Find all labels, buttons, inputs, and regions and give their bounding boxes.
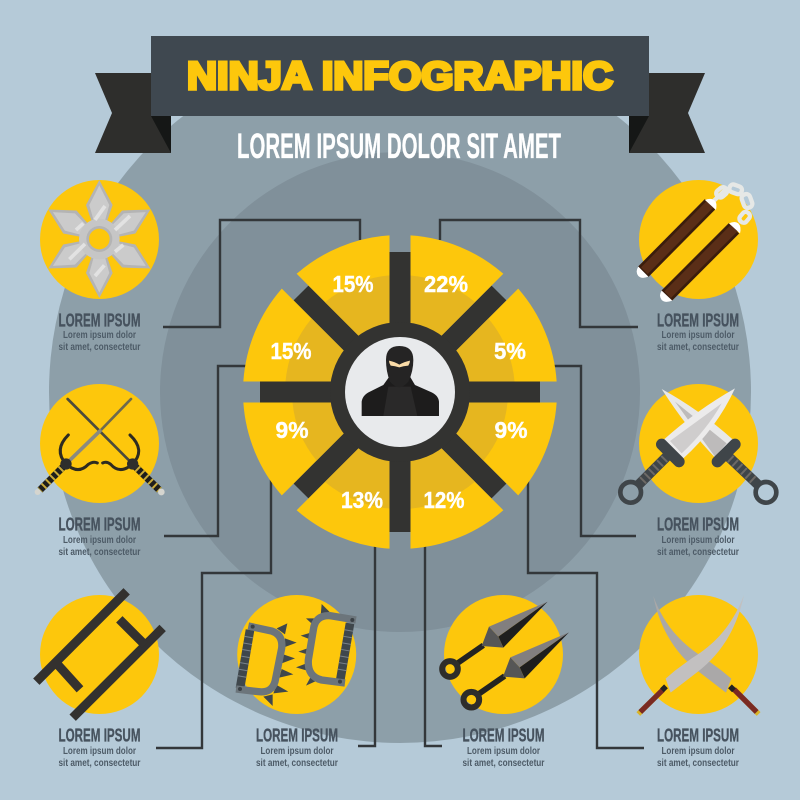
label: LOREM IPSUM xyxy=(58,724,140,746)
label: Lorem ipsum dolor xyxy=(662,746,735,757)
value 15% top: 15% xyxy=(332,271,374,297)
ribbon right tail xyxy=(629,73,705,153)
value 5%: 5% xyxy=(494,338,526,364)
label: LOREM IPSUM xyxy=(58,310,140,330)
ribbon banner with title xyxy=(95,36,705,153)
dark spokes xyxy=(260,252,540,532)
segment 5% xyxy=(425,289,584,447)
item: crossed swords xyxy=(638,595,759,769)
icon: shuriken xyxy=(42,180,157,298)
label: Lorem ipsum dolor xyxy=(63,746,136,757)
icon: tonfa pair xyxy=(36,591,163,718)
label: sit amet, consectetur xyxy=(58,547,141,558)
label: sit amet, consectetur xyxy=(462,758,545,769)
icon: crossed swords xyxy=(638,595,759,714)
icon: ninja xyxy=(362,346,439,416)
item: nunchaku xyxy=(637,180,758,353)
percent labels xyxy=(270,271,528,513)
segment 9% right xyxy=(425,402,557,495)
connector: kunai to 12% xyxy=(425,540,442,746)
segment 15% top xyxy=(297,208,455,367)
value 13%: 13% xyxy=(341,487,383,513)
value 12%: 12% xyxy=(424,487,464,513)
ribbon left tail xyxy=(95,73,171,153)
value 9% right: 9% xyxy=(494,417,528,443)
label: LOREM IPSUM xyxy=(657,310,739,330)
label: Lorem ipsum dolor xyxy=(63,330,136,341)
connector: sai to 15% xyxy=(164,366,250,536)
item: tonfa xyxy=(36,591,163,769)
item: throwing knives xyxy=(620,384,776,558)
connector: throwing knives to 5% xyxy=(550,366,636,536)
connector: tonfa to 9% xyxy=(156,478,271,748)
label: LOREM IPSUM xyxy=(657,724,739,746)
label xyxy=(58,724,141,769)
label: sit amet, consectetur xyxy=(657,342,739,353)
label: Lorem ipsum dolor xyxy=(662,535,735,546)
item: shuriken xyxy=(40,180,159,353)
icon: nunchaku xyxy=(637,183,753,302)
label xyxy=(58,310,141,353)
label xyxy=(58,514,141,558)
item: brass knuckles xyxy=(236,595,356,769)
segment 13% xyxy=(297,417,390,549)
segment 12% xyxy=(345,417,503,576)
label: sit amet, consectetur xyxy=(58,342,141,353)
label: LOREM IPSUM xyxy=(462,724,544,746)
label xyxy=(256,724,338,769)
connector: shuriken to 15% xyxy=(163,220,360,327)
label: sit amet, consectetur xyxy=(657,547,739,558)
radial chart xyxy=(216,208,584,576)
icon: crossed throwing knives xyxy=(620,388,776,503)
label: sit amet, consectetur xyxy=(657,758,739,769)
icon: crossed sai xyxy=(35,399,165,495)
hub white disc xyxy=(345,337,455,447)
connector: knuckles to 13% xyxy=(358,540,375,746)
value 15% left: 15% xyxy=(270,338,312,364)
title: NINJA INFOGRAPHIC xyxy=(187,55,613,98)
segment 15% left xyxy=(243,289,375,382)
ribbon main band xyxy=(151,36,649,116)
value 9% left: 9% xyxy=(276,417,308,443)
icon: kunai pair xyxy=(442,602,569,707)
label: Lorem ipsum dolor xyxy=(662,330,735,341)
icon: brass knuckles xyxy=(236,604,356,706)
label: LOREM IPSUM xyxy=(58,514,140,534)
item: kunai xyxy=(442,595,569,769)
connector: nunchaku to 22% xyxy=(440,220,638,327)
label: sit amet, consectetur xyxy=(256,758,338,769)
dark hub ring xyxy=(330,322,470,462)
segment 9% left xyxy=(216,337,375,495)
label: LOREM IPSUM xyxy=(256,724,338,746)
label: Lorem ipsum dolor xyxy=(63,535,136,546)
label: Lorem ipsum dolor xyxy=(260,746,334,757)
value 22%: 22% xyxy=(424,271,468,297)
segment 22% xyxy=(410,235,503,367)
label xyxy=(657,514,739,558)
item: sai xyxy=(35,384,165,558)
label xyxy=(657,310,739,353)
subtitle: LOREM IPSUM DOLOR SIT AMET xyxy=(237,127,561,166)
label xyxy=(657,724,739,769)
label: sit amet, consectetur xyxy=(58,758,141,769)
label xyxy=(462,724,545,769)
label: Lorem ipsum dolor xyxy=(467,746,540,757)
connector: swords to 9% xyxy=(528,478,644,748)
label: LOREM IPSUM xyxy=(657,514,739,534)
